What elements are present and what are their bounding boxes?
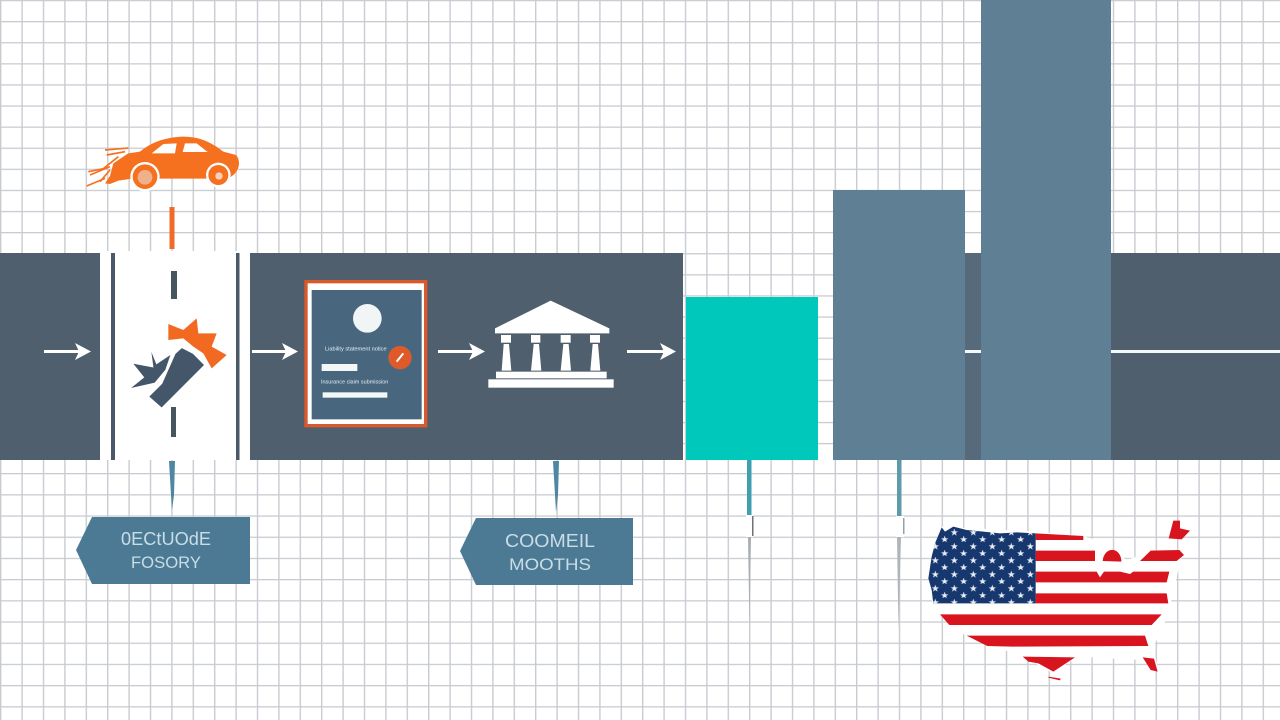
bar: tall slate — [981, 0, 1111, 460]
arrow: into collision — [44, 343, 91, 360]
white road segment — [100, 251, 250, 460]
road band line: right — [965, 350, 1280, 353]
connector to first tag — [169, 461, 175, 510]
icon: legal document card — [304, 280, 427, 427]
dark road band: section between bars — [965, 253, 981, 460]
tag: second label: COOMEIL — [505, 531, 595, 551]
arrow: to document — [252, 343, 298, 360]
icon: legal document card: Liability statement notice — [325, 347, 387, 353]
orange connector from car — [170, 207, 174, 249]
icon: crashing orange car — [87, 137, 239, 191]
bar: teal — [686, 297, 818, 460]
icon: collision burst — [128, 318, 227, 408]
icon: courthouse — [488, 301, 614, 388]
connector to second tag — [553, 461, 559, 512]
icon: legal document card: Insurance claim submission — [321, 379, 388, 385]
pin: slate bar marker — [896, 460, 904, 630]
tag: second label — [460, 518, 633, 585]
bar: medium slate — [833, 190, 965, 460]
arrow: to courthouse — [438, 343, 485, 360]
pin: teal bar marker — [746, 460, 754, 626]
arrow: to teal bar — [627, 343, 676, 360]
icon: USA map with flag pattern — [928, 521, 1190, 680]
tag: first label: FOSORY — [131, 553, 201, 572]
dark road band: right section — [1111, 253, 1280, 460]
tag: first label: 0ECtUOdE — [121, 529, 211, 549]
tag: first label — [76, 517, 250, 584]
dark road band: left and centre section — [0, 253, 683, 460]
tag: second label: MOOTHS — [509, 555, 591, 574]
